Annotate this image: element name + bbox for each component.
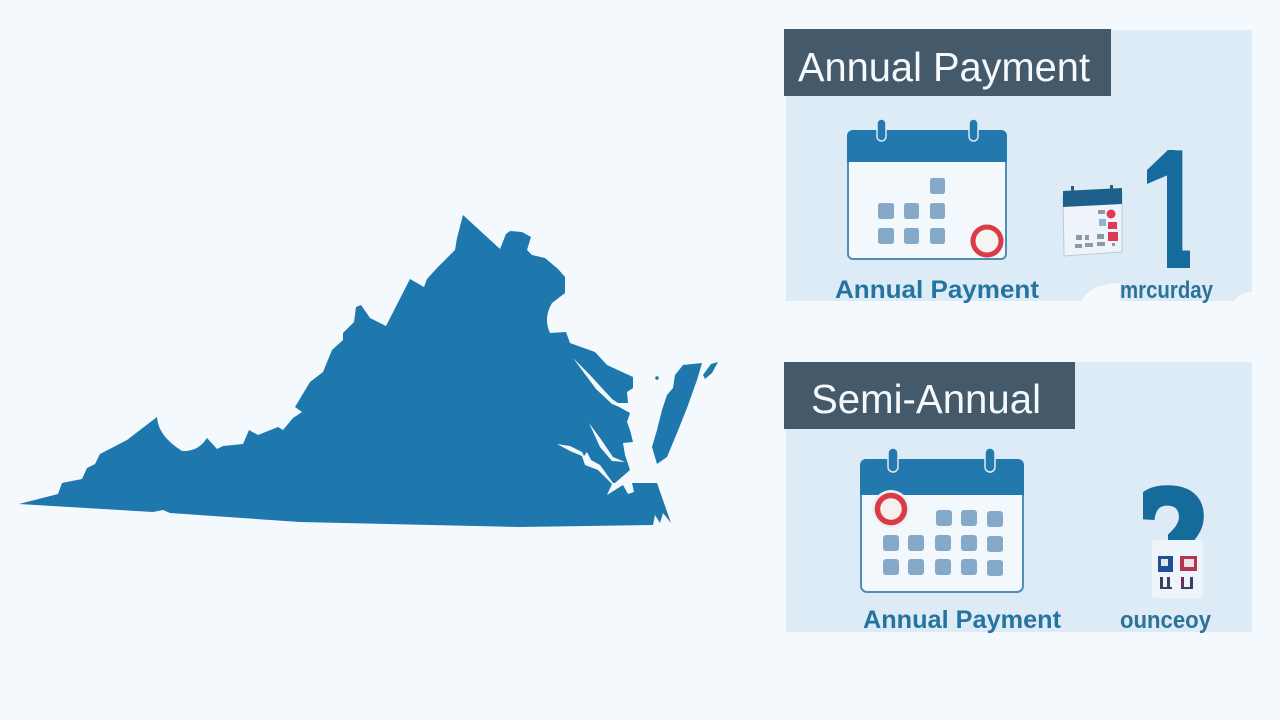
- heading: annual payment: Annual Payment: [798, 44, 1091, 90]
- map: river inlet north: [573, 358, 630, 411]
- map: Virginia state silhouette: [19, 215, 718, 527]
- panel background: [786, 362, 1252, 632]
- label: annual payment: Annual Payment: [863, 606, 1062, 634]
- map: eastern shore peninsula: [652, 363, 702, 464]
- map: river inlet south: [557, 444, 634, 495]
- label: annual payment: Annual Payment: [835, 276, 1040, 304]
- heading: annual payment: [784, 29, 1111, 96]
- panel background: [786, 30, 1252, 301]
- map: barrier island: [703, 362, 718, 379]
- numeral: 2: 2: [1126, 456, 1209, 624]
- map: small islet: [655, 376, 659, 380]
- numeral: 1: [1147, 150, 1190, 268]
- numeral: 1: 1: [1119, 114, 1214, 305]
- panel: annual payment: [784, 29, 1252, 305]
- map: river inlet middle: [589, 423, 625, 462]
- heading: semi-annual: Semi-Annual: [811, 376, 1041, 422]
- map: mainland: [19, 215, 671, 527]
- icon: small calendar: [1063, 185, 1122, 256]
- heading: semi-annual: [784, 362, 1075, 429]
- icon: large calendar: [847, 119, 1007, 259]
- decorative white notches: [1080, 283, 1252, 303]
- label: monthly day: ounceoy: [1120, 607, 1212, 634]
- icon: small card: [1152, 540, 1203, 598]
- label: monthly day: mrcurday: [1120, 277, 1214, 304]
- panel: semi-annual payment: [784, 362, 1252, 634]
- icon: large calendar: [860, 448, 1024, 592]
